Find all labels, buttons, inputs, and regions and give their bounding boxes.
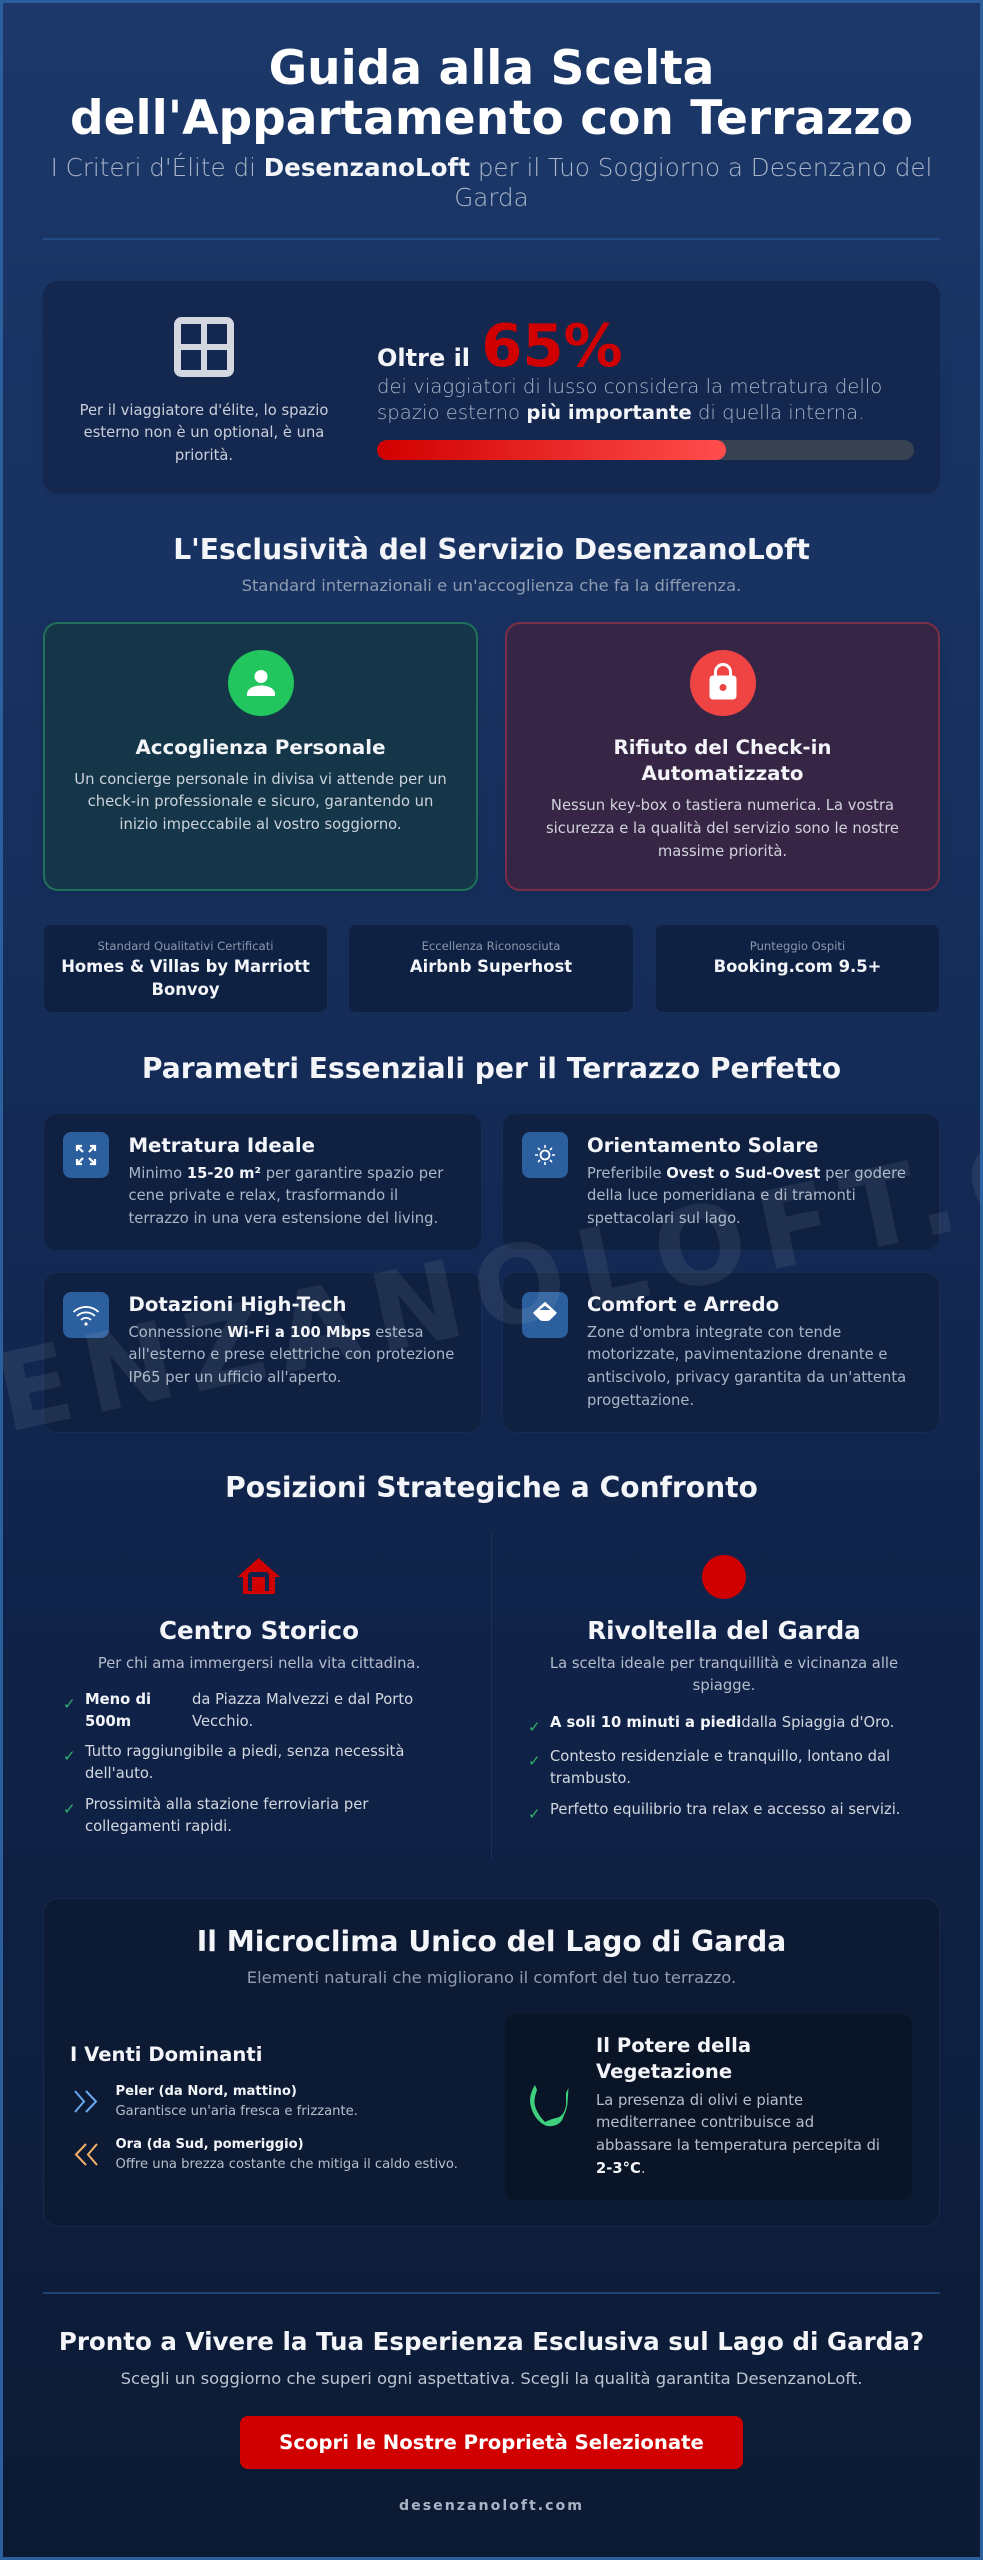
list item: ✓ — [528, 1718, 541, 1736]
footer url: desenzanoloft.com — [399, 2498, 584, 2514]
card title: Automatizzato — [641, 762, 804, 785]
subtitle: Garda — [454, 183, 529, 212]
section heading: posizioni: Posizioni Strategiche a Confronto — [225, 1471, 758, 1504]
card: orientamento: Orientamento Solare — [587, 1134, 818, 1157]
card: accoglienza personale — [43, 622, 478, 891]
caption — [80, 402, 328, 464]
list item: Tutto raggiungibile a piedi, senza necessità — [85, 1742, 404, 1760]
list item: Meno di — [85, 1690, 151, 1708]
list item — [63, 1796, 368, 1835]
column subtitle — [550, 1654, 898, 1694]
wind: peler: Peler (da Nord, mattino) — [116, 2084, 297, 2098]
list item: dell'auto. — [85, 1765, 153, 1782]
vegetation box: abbassare la temperatura percepita di — [596, 2137, 880, 2154]
certification: marriott: Bonvoy — [151, 980, 220, 998]
button: Scopri le Nostre Proprietà Selezionate — [279, 2431, 704, 2454]
column title: Centro Storico — [159, 1616, 359, 1645]
winds group — [70, 2043, 458, 2172]
card title: Rifiuto del Check-in — [614, 736, 831, 759]
certification: booking: Booking.com 9.5+ — [714, 956, 881, 976]
stat description: dei viaggiatori di lusso considera la metratura dello — [377, 375, 882, 398]
list item: Contesto residenziale e tranquillo, lontano dal — [550, 1748, 890, 1764]
panel: statistic 65% — [43, 281, 940, 494]
section heading: parametri: Parametri Essenziali per il Terrazzo Perfetto — [142, 1052, 841, 1085]
section subtitle: Standard internazionali e un'accoglienza che fa la differenza. — [242, 576, 741, 594]
icon: house — [238, 1558, 280, 1594]
list item: Perfetto equilibrio tra relax e accesso ai servizi. — [550, 1800, 900, 1818]
card: orientamento — [502, 1113, 940, 1251]
card title — [614, 736, 831, 785]
panel: microclima — [43, 1898, 940, 2227]
card: dotazioni: all'esterno e prese elettriche con protezione — [128, 1346, 454, 1363]
call to action — [43, 2292, 940, 2514]
card: metratura: Minimo 15-20 m² per garantire spazio per — [128, 1164, 443, 1182]
caption: esterno non è un optional, è una — [84, 424, 324, 441]
card text: inizio impeccabile al vostro soggiorno. — [119, 816, 402, 833]
icon: location dot — [702, 1555, 746, 1599]
card title: Accoglienza Personale — [136, 736, 385, 759]
certification: marriott: Homes & Villas by Marriott — [61, 956, 310, 976]
card: orientamento: Preferibile Ovest o Sud-Ovest per godere — [587, 1164, 906, 1182]
card: comfort: progettazione. — [587, 1392, 694, 1409]
section heading: esclusivita: L'Esclusività del Servizio DesenzanoLoft — [173, 533, 810, 566]
button — [240, 2416, 743, 2469]
panel title: Il Microclima Unico del Lago di Garda — [197, 1925, 786, 1958]
list item — [63, 1690, 413, 1730]
comparison — [63, 1532, 900, 1858]
card text — [74, 770, 447, 833]
certification: booking — [655, 924, 940, 1013]
vegetation box: Vegetazione — [596, 2060, 732, 2083]
card text: massime priorità. — [658, 843, 787, 860]
column subtitle: spiagge. — [693, 1677, 755, 1694]
card text: check-in professionale e sicuro, garantendo un — [88, 793, 433, 810]
title: dell'Appartamento con Terrazzo — [70, 90, 913, 146]
certification: airbnb: Airbnb Superhost — [410, 956, 572, 976]
header — [43, 40, 940, 240]
wind: ora: Ora (da Sud, pomeriggio) — [116, 2136, 304, 2152]
card: comfort: Comfort e Arredo — [587, 1293, 779, 1316]
list item: ✓ — [528, 1752, 541, 1770]
card text: Nessun key-box o tastiera numerica. La vostra — [551, 797, 894, 814]
wind: ora: Offre una brezza costante che mitiga il caldo estivo. — [116, 2156, 458, 2172]
winds group: I Venti Dominanti — [70, 2043, 262, 2066]
caption: priorità. — [175, 447, 233, 464]
card: dotazioni: Connessione Wi-Fi a 100 Mbps estesa — [128, 1324, 424, 1340]
wind: peler — [74, 2084, 358, 2118]
card text: Un concierge personale in divisa vi attende per un — [74, 770, 447, 788]
vegetation box: mediterranee contribuisce ad — [596, 2114, 814, 2131]
vegetation box: Il Potere della — [596, 2034, 751, 2057]
column: rivoltella — [528, 1555, 900, 1822]
stat description: spazio esterno più importante di quella interna. — [377, 401, 864, 424]
stat description — [377, 375, 882, 424]
subtitle: I Criteri d'Élite di DesenzanoLoft per il Tuo Soggiorno a Desenzano del — [51, 153, 932, 182]
card: metratura: Metratura Ideale — [128, 1134, 315, 1157]
caption: Per il viaggiatore d'élite, lo spazio — [80, 402, 328, 418]
card: dotazioni: Dotazioni High-Tech — [128, 1293, 347, 1316]
subtitle — [51, 152, 932, 212]
stat headline: Oltre il 65% — [377, 310, 623, 380]
icon: person — [228, 650, 294, 716]
list item: ✓ — [63, 1800, 76, 1818]
cta title: Pronto a Vivere la Tua Esperienza Esclusiva sul Lago di Garda? — [59, 2327, 924, 2356]
wind: ora — [74, 2136, 458, 2172]
column title: Rivoltella del Garda — [587, 1616, 861, 1645]
cta text: Scegli un soggiorno che superi ogni aspettativa. Scegli la qualità garantita DesenzanoLoft. — [121, 2368, 862, 2388]
title: Guida alla Scelta — [269, 40, 714, 96]
icon: window — [174, 317, 234, 377]
card: comfort: antiscivolo, privacy garantita da un'attenta — [587, 1369, 906, 1386]
certification: booking: Punteggio Ospiti — [750, 938, 845, 952]
progress bar — [377, 440, 914, 460]
column: centro storico — [63, 1558, 420, 1835]
icon: wifi — [63, 1292, 109, 1338]
icon: leaf swoosh — [530, 2085, 568, 2126]
list item: ✓ — [63, 1694, 76, 1712]
card: dotazioni: IP65 per un ufficio all'aperto. — [128, 1369, 341, 1386]
certification: marriott: Standard Qualitativi Certificati — [98, 938, 273, 952]
card: dotazioni — [43, 1272, 482, 1433]
certification: airbnb — [348, 924, 634, 1013]
panel subtitle: Elementi naturali che migliorano il comfort del tuo terrazzo. — [247, 1968, 736, 1986]
card: metratura: cene private e relax, trasformando il — [128, 1187, 398, 1204]
column subtitle: La scelta ideale per tranquillità e vicinanza alle — [550, 1654, 898, 1672]
column subtitle: Per chi ama immergersi nella vita cittadina. — [98, 1654, 420, 1672]
card: orientamento: spettacolari sul lago. — [587, 1210, 741, 1227]
icon: expand — [63, 1132, 109, 1178]
list item — [528, 1748, 890, 1787]
card text: sicurezza e la qualità del servizio sono le nostre — [546, 820, 899, 837]
section heading: esclusivita — [173, 533, 810, 594]
list item — [63, 1742, 404, 1782]
list item: collegamenti rapidi. — [85, 1818, 232, 1835]
list item: Vecchio. — [192, 1713, 253, 1730]
card: comfort — [502, 1272, 940, 1433]
list item: ✓ — [528, 1804, 541, 1822]
certification: airbnb: Eccellenza Riconosciuta — [422, 938, 560, 952]
icon: lock — [690, 650, 756, 716]
icon: sun — [522, 1132, 568, 1178]
card: comfort: motorizzate, pavimentazione drenante e — [587, 1346, 887, 1363]
list item: A soli 10 minuti a piedidalla Spiaggia d'Oro. — [550, 1714, 894, 1730]
title — [70, 40, 913, 146]
certifications row — [44, 925, 939, 1012]
certification: marriott — [43, 924, 328, 1013]
list item: 500m — [85, 1713, 131, 1730]
list item: da Piazza Malvezzi e dal Porto — [192, 1690, 413, 1708]
card: metratura: terrazzo in una vera estensione del living. — [128, 1210, 438, 1227]
wind: peler: Garantisce un'aria fresca e frizzante. — [116, 2104, 358, 2118]
list item: Prossimità alla stazione ferroviaria per — [85, 1796, 368, 1812]
card text — [546, 797, 899, 860]
card: comfort: Zone d'ombra integrate con tende — [587, 1324, 841, 1340]
icon: chevrons left — [74, 2143, 98, 2166]
vegetation box — [505, 2014, 912, 2200]
vegetation box: 2-3°C. — [596, 2160, 646, 2177]
vegetation box: La presenza di olivi e piante — [596, 2092, 803, 2108]
icon: comfort — [522, 1292, 568, 1338]
card: metratura — [43, 1113, 482, 1251]
list item: ✓ — [63, 1746, 76, 1764]
card: rifiuto check-in — [505, 622, 940, 891]
icon: chevrons right — [74, 2090, 98, 2113]
list item: trambusto. — [550, 1770, 631, 1787]
card: orientamento: della luce pomeridiana e di tramonti — [587, 1187, 856, 1204]
